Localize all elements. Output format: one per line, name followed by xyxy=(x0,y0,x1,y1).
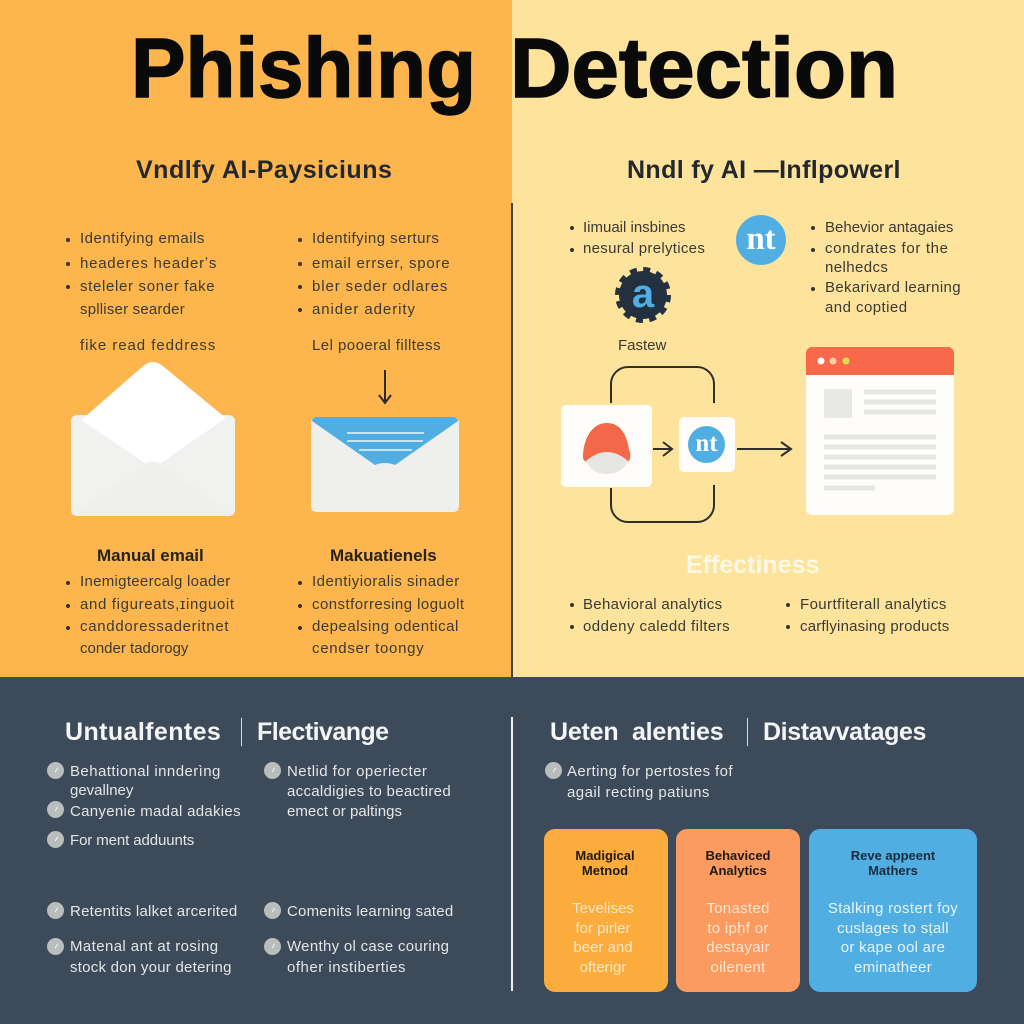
text block: bottom col 1: Behattional innderìng xyxy=(70,763,221,780)
text block: bottom col 2 xyxy=(264,762,453,976)
flow diagram connector xyxy=(610,366,793,523)
text block: lower left bullets: and figureats,ɪinguoit xyxy=(80,596,235,613)
card: Behaviced Analytics: to ipḥf or xyxy=(707,920,769,937)
card: Behaviced Analytics xyxy=(676,829,800,992)
heading: Manual email: Manual email xyxy=(97,546,204,565)
text block: bottom col 2: Comenits learning sated xyxy=(287,903,453,920)
text block: effectiveness left xyxy=(570,596,730,635)
icon: gear with a xyxy=(615,267,671,323)
icon: nt circle xyxy=(736,215,786,265)
text block: bottom col 1: Retentits lalket arcerited xyxy=(70,903,237,920)
text block: bottom col 2: Netlid for operiecter xyxy=(287,763,427,780)
text block: lower second bullets: constforresing loguolt xyxy=(312,596,464,613)
icon: blue envelope xyxy=(311,417,459,512)
vertical divider upper xyxy=(511,203,513,677)
card: Reve appeent Mathers xyxy=(809,829,977,992)
card: Reve appeent Mathers: cuslages to sṭall xyxy=(837,920,949,937)
card: Behaviced Analytics: Behaviced xyxy=(705,848,771,863)
card: Madigical Metnod: Metnod xyxy=(582,863,628,878)
card: Reve appeent Mathers: or kape ool are xyxy=(841,939,945,956)
heading: Makuatienels: Makuatienels xyxy=(330,546,437,565)
text block: bottom col 3: Aerting for pertostes fof xyxy=(567,763,733,780)
text block: right upper right bullets: and coptied xyxy=(825,299,908,316)
text block: right upper right bullets: nelhedcs xyxy=(825,259,888,276)
heading: left panel: Vndlfy AI-Paysiciuns xyxy=(136,156,392,184)
text block: lower second bullets: cendser toongy xyxy=(312,640,424,657)
text block: right upper right bullets: condrates for the xyxy=(825,240,949,257)
text block: lower second bullets xyxy=(298,573,464,657)
panel: cream background xyxy=(512,0,1024,677)
text block: effectiveness left: oddeny caledd filters xyxy=(583,618,730,635)
text block: lower left bullets: Inemigteercalg loader xyxy=(80,573,231,590)
heading: Effectiness: Effectiness xyxy=(686,551,819,579)
text block: bottom col 1 xyxy=(47,762,241,976)
text block: bottom col 3: agail recting patiuns xyxy=(567,784,710,801)
text block: left column bullets: fike read feddress xyxy=(80,337,216,354)
text block: bottom col 1: stock don your detering xyxy=(70,959,232,976)
text block: lower left bullets: conder tadorogy xyxy=(80,640,188,657)
title: Phishing xyxy=(131,21,476,115)
text block: second column bullets: email errser, spore xyxy=(312,255,450,272)
card: Madigical Metnod xyxy=(544,829,668,992)
text block: bottom col 1: gevallney xyxy=(70,782,133,799)
icon: nt badge xyxy=(688,426,725,463)
text block: bottom col 1: Matenal ant at rosing xyxy=(70,938,218,955)
text block: lower second bullets: Identiyioralis sinader xyxy=(312,573,460,590)
card: Reve appeent Mathers: Stalking rostert foy xyxy=(828,900,958,917)
text block: right upper right bullets xyxy=(811,219,961,316)
text block: second column bullets: bler seder odlares xyxy=(312,278,448,295)
arrow: down xyxy=(378,370,392,404)
text block: left column bullets xyxy=(66,230,217,354)
text block: second column bullets xyxy=(298,230,450,354)
text block: right upper left bullets: nesural prelytices xyxy=(583,240,705,257)
title xyxy=(131,21,898,116)
text block: right upper right bullets: Behevior antagaies xyxy=(825,219,953,236)
card: Reve appeent Mathers: eminatheer xyxy=(854,959,932,976)
text block: bottom col 2: ofher instiberties xyxy=(287,959,406,976)
text block: second column bullets: Lel pooeral filltess xyxy=(312,337,441,354)
title: Detection xyxy=(510,21,898,115)
card: Madigical Metnod: Tevelises xyxy=(572,900,634,917)
text block: right upper left bullets xyxy=(570,219,705,257)
icon: gear with a: a xyxy=(632,272,655,316)
text block: effectiveness right xyxy=(786,596,949,635)
text block: bottom col 1: Canyenie madal adakies xyxy=(70,803,241,820)
heading: bottom left: Untualfentes xyxy=(65,718,221,746)
browser window xyxy=(806,347,954,515)
card: Madigical Metnod: ofterigr xyxy=(580,959,626,976)
card: Reve appeent Mathers: Mathers xyxy=(868,863,918,878)
text block: second column bullets: anider aderity xyxy=(312,301,416,318)
text block: bottom col 1: For ment adduunts xyxy=(70,832,194,849)
text block: effectiveness left: Behavioral analytics xyxy=(583,596,722,613)
card: Madigical Metnod: for pirler xyxy=(575,920,630,937)
card: Madigical Metnod: beer and xyxy=(573,939,633,956)
heading: bottom left two: Flectivange xyxy=(257,718,388,746)
text block: lower left bullets xyxy=(66,573,235,657)
text block: second column bullets: Identifying serturs xyxy=(312,230,439,247)
panel: dark background xyxy=(0,677,1024,1024)
card: Behaviced Analytics: Tonasted xyxy=(706,900,770,917)
heading: bottom right: Ueten alenties xyxy=(550,718,723,746)
icon: nt card xyxy=(679,417,735,472)
card: Reve appeent Mathers: Reve appeent xyxy=(851,848,935,863)
text block: lower left bullets: canddoressaderitnet xyxy=(80,618,229,635)
panel: orange background xyxy=(0,0,512,677)
icon: open envelope xyxy=(71,362,235,516)
text block: left column bullets: headeres headerʼs xyxy=(80,255,217,272)
text block: right upper left bullets: Iimuail insbines xyxy=(583,219,686,236)
text block: left column bullets: splliser searder xyxy=(80,301,185,318)
label: Fastew: Fastew xyxy=(618,337,666,354)
card: Behaviced Analytics: Analytics xyxy=(709,863,767,878)
text block: effectiveness right: carflyinasing products xyxy=(800,618,949,635)
text block: bottom col 2: accaldigies to beactired xyxy=(287,783,451,800)
card: Madigical Metnod: Madigical xyxy=(575,848,635,863)
icon: hat card xyxy=(561,405,652,487)
icon: nt badge: nt xyxy=(695,430,718,457)
heading: right panel: Nndl fy AI —Inflpowerl xyxy=(627,156,901,184)
card: Behaviced Analytics: destayair xyxy=(706,939,770,956)
card: Behaviced Analytics: oilenent xyxy=(711,959,765,976)
icon: nt circle: nt xyxy=(746,221,776,257)
heading: bottom right two: Distavvatages xyxy=(763,718,926,746)
text block: bottom col 2: emect or paltings xyxy=(287,803,402,820)
text block: effectiveness right: Fourtfiterall analytics xyxy=(800,596,947,613)
text block: left column bullets: Identifying emails xyxy=(80,230,205,247)
text block: bottom col 2: Wenthy ol case couring xyxy=(287,938,449,955)
text block: left column bullets: steleler soner fake xyxy=(80,278,215,295)
text block: right upper right bullets: Bekarivard learning xyxy=(825,279,961,296)
text block: lower second bullets: depealsing odentical xyxy=(312,618,459,635)
text block: bottom col 3 xyxy=(545,762,733,801)
